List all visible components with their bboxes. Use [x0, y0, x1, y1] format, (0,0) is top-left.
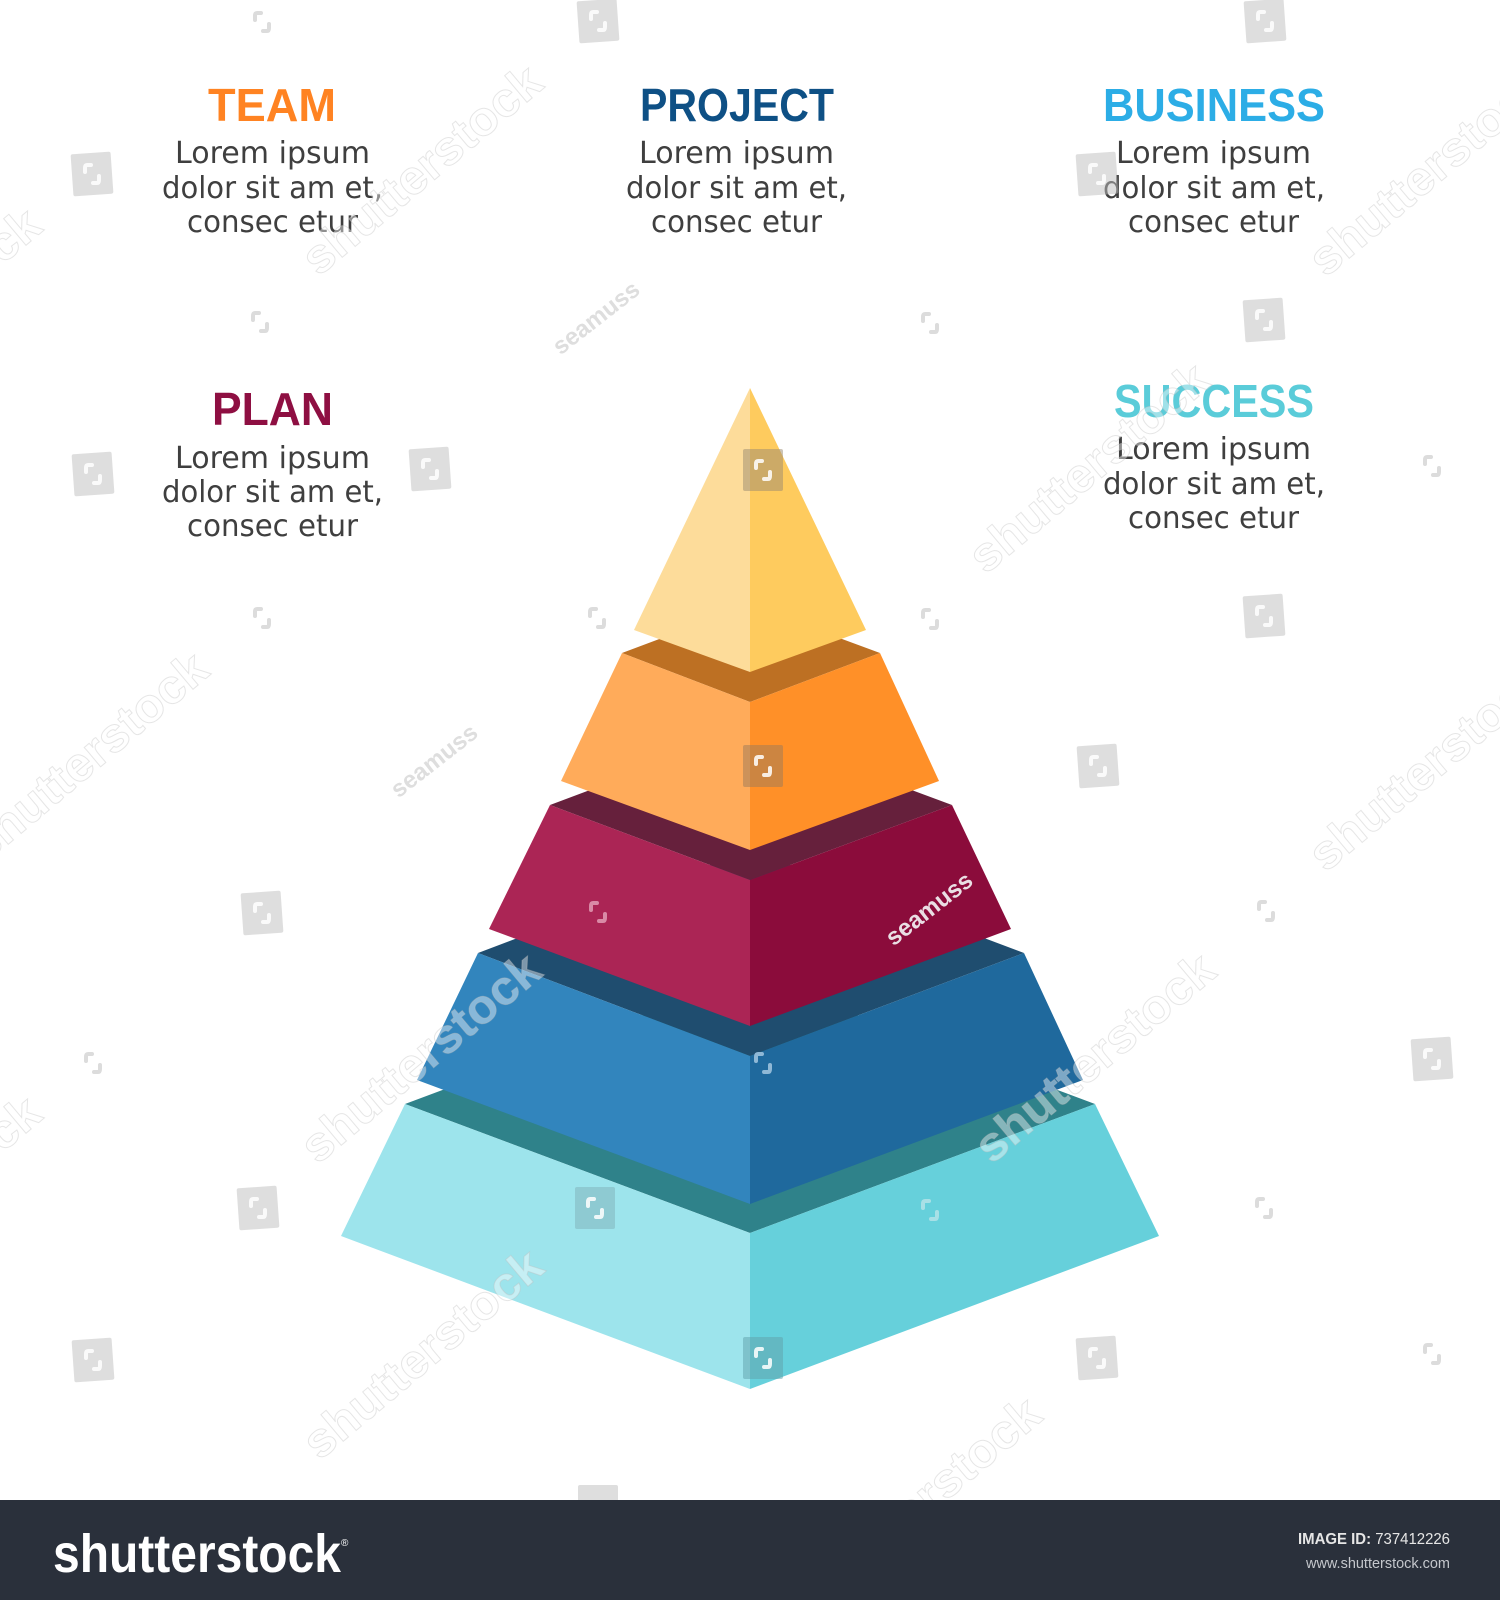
text: project body: dolor sit am et,	[626, 171, 847, 206]
text: business body: consec etur	[1128, 205, 1300, 240]
heading: business: BUSINESS	[1103, 79, 1325, 131]
tier 5: teal base	[341, 975, 1159, 1389]
watermark: diagonal shutterstock text: shutterstock	[293, 1238, 554, 1470]
registered mark: ®	[341, 1538, 349, 1549]
text: plan body: dolor sit am et,	[162, 475, 383, 510]
text: business body	[1103, 136, 1325, 240]
text: success body: Lorem ipsum	[1116, 432, 1311, 467]
text: plan body: Lorem ipsum	[175, 441, 370, 476]
website: www.shutterstock.com	[1305, 1555, 1450, 1572]
text: team body: dolor sit am et,	[162, 171, 383, 206]
watermark: seamuss credits: seamuss	[386, 719, 483, 803]
label: plan	[162, 383, 383, 544]
heading: project: PROJECT	[640, 79, 834, 131]
watermark: seamuss credits	[386, 276, 978, 951]
watermark: diagonal shutterstock text: shutterstock	[959, 352, 1220, 584]
text: business body: Lorem ipsum	[1116, 136, 1311, 171]
heading: team: TEAM	[208, 79, 336, 131]
text: project body: Lorem ipsum	[639, 136, 834, 171]
text: plan body	[162, 441, 383, 544]
text: team body: consec etur	[187, 205, 359, 240]
tier 4: blue	[417, 850, 1083, 1204]
watermark: small outline marks	[86, 13, 1439, 1363]
watermark: diagonal shutterstock text: shutterstock	[291, 942, 552, 1174]
watermark: diagonal shutterstock text: shutterstock	[965, 942, 1226, 1174]
tier 1: yellow tip	[634, 388, 866, 672]
image id: IMAGE ID: 737412226	[1298, 1531, 1450, 1548]
footer bar	[0, 1500, 1500, 1600]
label: team	[162, 79, 383, 240]
label: business	[1103, 79, 1325, 240]
label: project	[626, 79, 847, 240]
text: team body	[162, 136, 383, 240]
heading: success: SUCCESS	[1114, 375, 1314, 427]
footer logo: shutterstock	[53, 1524, 342, 1584]
text: success body: dolor sit am et,	[1103, 467, 1325, 502]
watermark: seamuss credits: seamuss	[548, 276, 645, 360]
heading: plan: PLAN	[212, 383, 333, 435]
text: team body: Lorem ipsum	[175, 136, 370, 171]
text: success body	[1103, 432, 1325, 536]
label: success	[1103, 375, 1325, 536]
text: business body: dolor sit am et,	[1103, 171, 1325, 206]
watermark: swirl marks	[85, 12, 1439, 1369]
watermark: seamuss credits: seamuss	[881, 867, 978, 951]
watermark: diagonal shutterstock text: shutterstock	[292, 54, 553, 286]
tier 3: maroon	[489, 730, 1011, 1026]
tier 2: orange	[561, 605, 939, 850]
text: plan body: consec etur	[187, 509, 359, 544]
pyramid diagram	[341, 388, 1159, 1389]
text: success body: consec etur	[1128, 501, 1300, 536]
text: project body	[626, 136, 847, 240]
text: project body: consec etur	[651, 205, 823, 240]
